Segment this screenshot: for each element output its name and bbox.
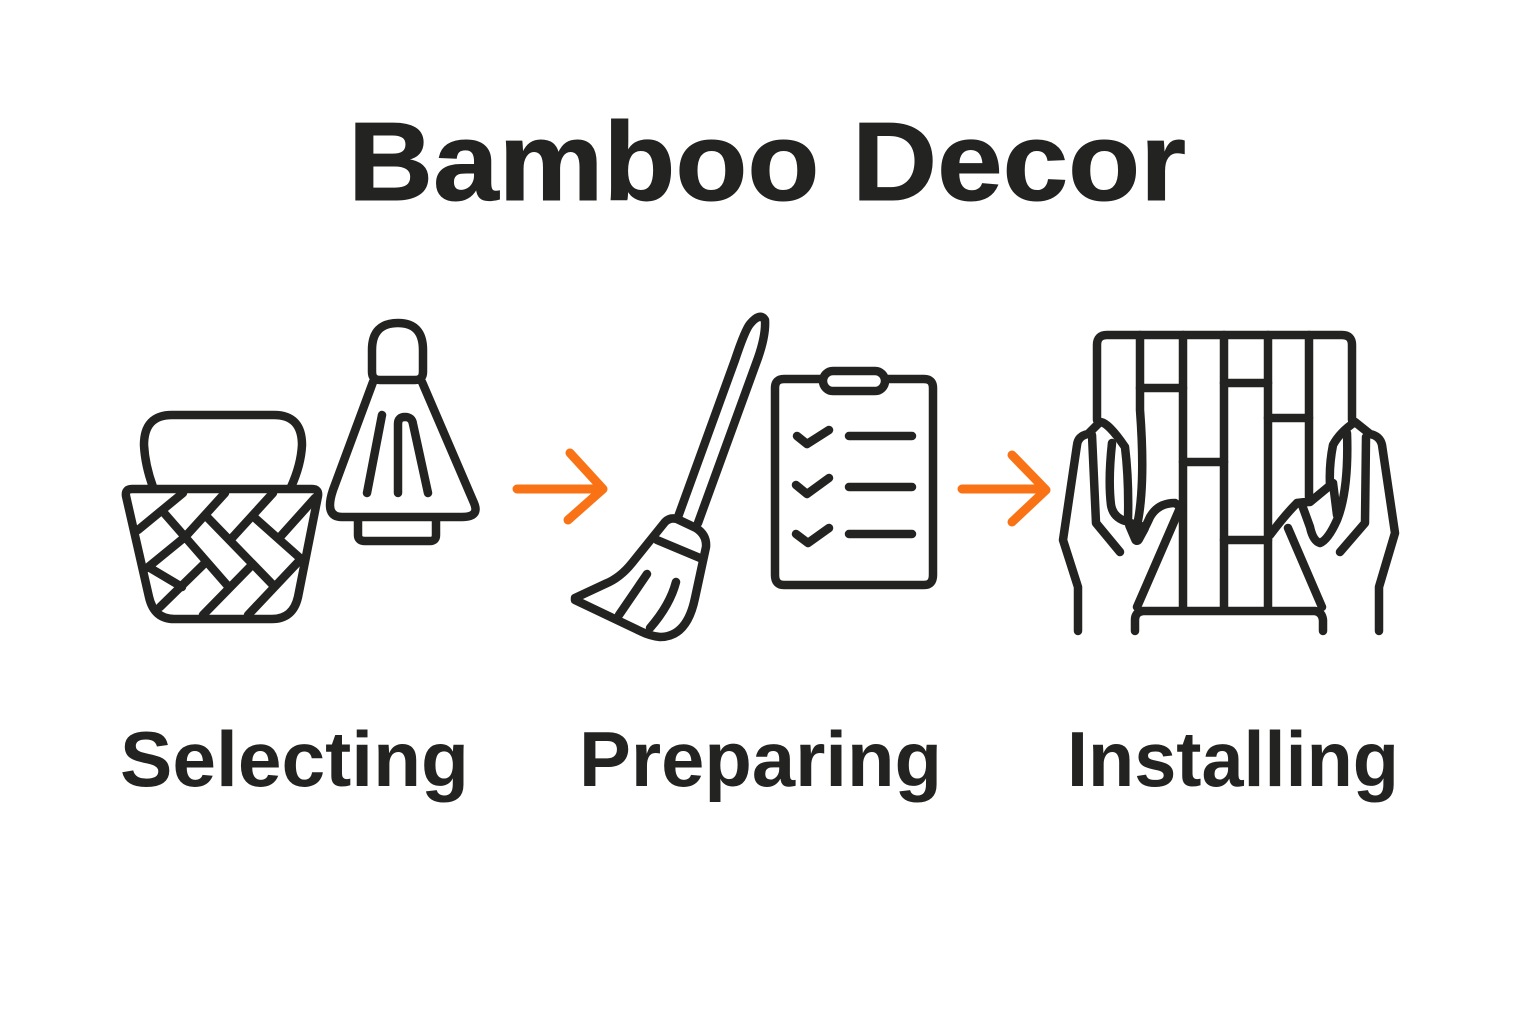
icon: hands installing bamboo panel (1063, 335, 1395, 631)
label: Preparing: Preparing (579, 715, 942, 803)
icon: woven basket (126, 415, 318, 619)
label: Selecting: Selecting (120, 715, 469, 803)
arrow: preparing to installing (962, 455, 1046, 522)
icon: checklist clipboard (775, 371, 933, 585)
icon: bamboo lamp (330, 323, 476, 541)
icon: broom (575, 317, 765, 637)
arrow: selecting to preparing (517, 453, 603, 520)
title: Bamboo Decor (348, 100, 1186, 224)
label: Installing: Installing (1067, 715, 1399, 803)
